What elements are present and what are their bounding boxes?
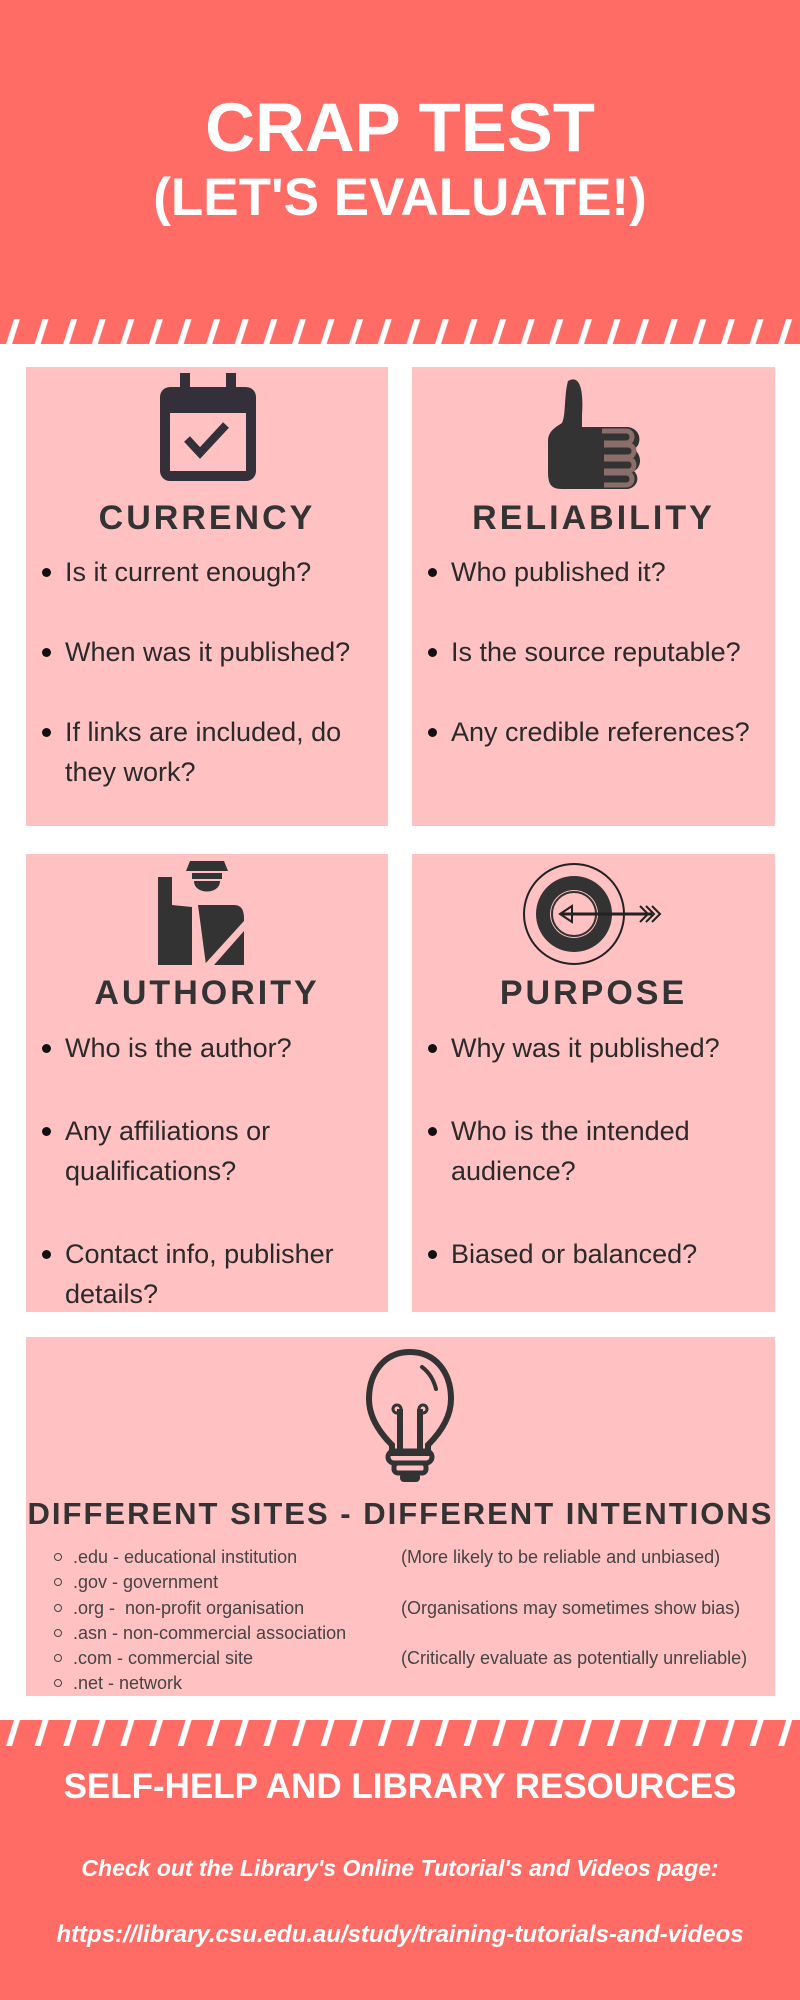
- heading: purpose: PURPOSE: [500, 974, 687, 1012]
- icon: calendar: [160, 373, 256, 481]
- heading: authority: AUTHORITY: [94, 974, 320, 1012]
- domain list: .com - commercial site: [73, 1648, 253, 1668]
- heading: currency: CURRENCY: [99, 499, 315, 537]
- panel: different sites: [26, 1337, 775, 1696]
- bullets: Who published it?: [451, 557, 666, 587]
- bullets: Any credible references?: [451, 717, 750, 747]
- panel: purpose: [412, 854, 775, 1312]
- footer band: [0, 1720, 800, 2000]
- footer url: https://library.csu.edu.au/study/training-tutorials-and-videos: [56, 1921, 744, 1948]
- domain list: [54, 1547, 747, 1693]
- bullets: Who is the author?: [65, 1033, 292, 1063]
- bullets: [428, 557, 750, 747]
- icon: light bulb: [366, 1349, 454, 1482]
- domain list: .asn - non-commercial association: [73, 1623, 346, 1643]
- bullets: Contact info, publisher details?: [65, 1239, 334, 1309]
- domain list: .org - non-profit organisation: [73, 1598, 304, 1618]
- heading: reliability: RELIABILITY: [472, 499, 715, 537]
- bullets: Why was it published?: [451, 1033, 720, 1063]
- panel: authority: [26, 854, 388, 1312]
- header band: [0, 0, 800, 344]
- domain list: (Organisations may sometimes show bias): [401, 1598, 740, 1618]
- domain list: .edu - educational institution: [73, 1547, 297, 1567]
- panel: reliability: [412, 367, 775, 826]
- bullets: Who is the intended audience?: [451, 1116, 690, 1186]
- icon: officer: [158, 861, 244, 965]
- bullets: Is it current enough?: [65, 557, 311, 587]
- domain list: (Critically evaluate as potentially unreliable): [401, 1648, 747, 1668]
- heading: different sites: DIFFERENT SITES - DIFFERENT INTENTIONS: [28, 1496, 773, 1531]
- bullets: If links are included, do they work?: [65, 717, 341, 787]
- panel: currency: [26, 367, 388, 826]
- bullets: [42, 1033, 334, 1309]
- domain list: .gov - government: [73, 1572, 218, 1592]
- subtitle: (LET'S EVALUATE!): [153, 168, 647, 227]
- bullets: [428, 1033, 720, 1269]
- bullets: Biased or balanced?: [451, 1239, 697, 1269]
- icon: thumbs up: [548, 379, 640, 489]
- bullets: When was it published?: [65, 637, 350, 667]
- icon: target: [523, 863, 662, 965]
- bullets: Is the source reputable?: [451, 637, 741, 667]
- footer text: Check out the Library's Online Tutorial's and Videos page:: [81, 1855, 719, 1881]
- title: CRAP TEST: [205, 89, 595, 166]
- domain list: .net - network: [73, 1673, 182, 1693]
- bullets: Any affiliations or qualifications?: [65, 1116, 270, 1186]
- footer heading: SELF-HELP AND LIBRARY RESOURCES: [64, 1767, 736, 1806]
- bullets: [42, 557, 350, 787]
- domain list: (More likely to be reliable and unbiased): [401, 1547, 720, 1567]
